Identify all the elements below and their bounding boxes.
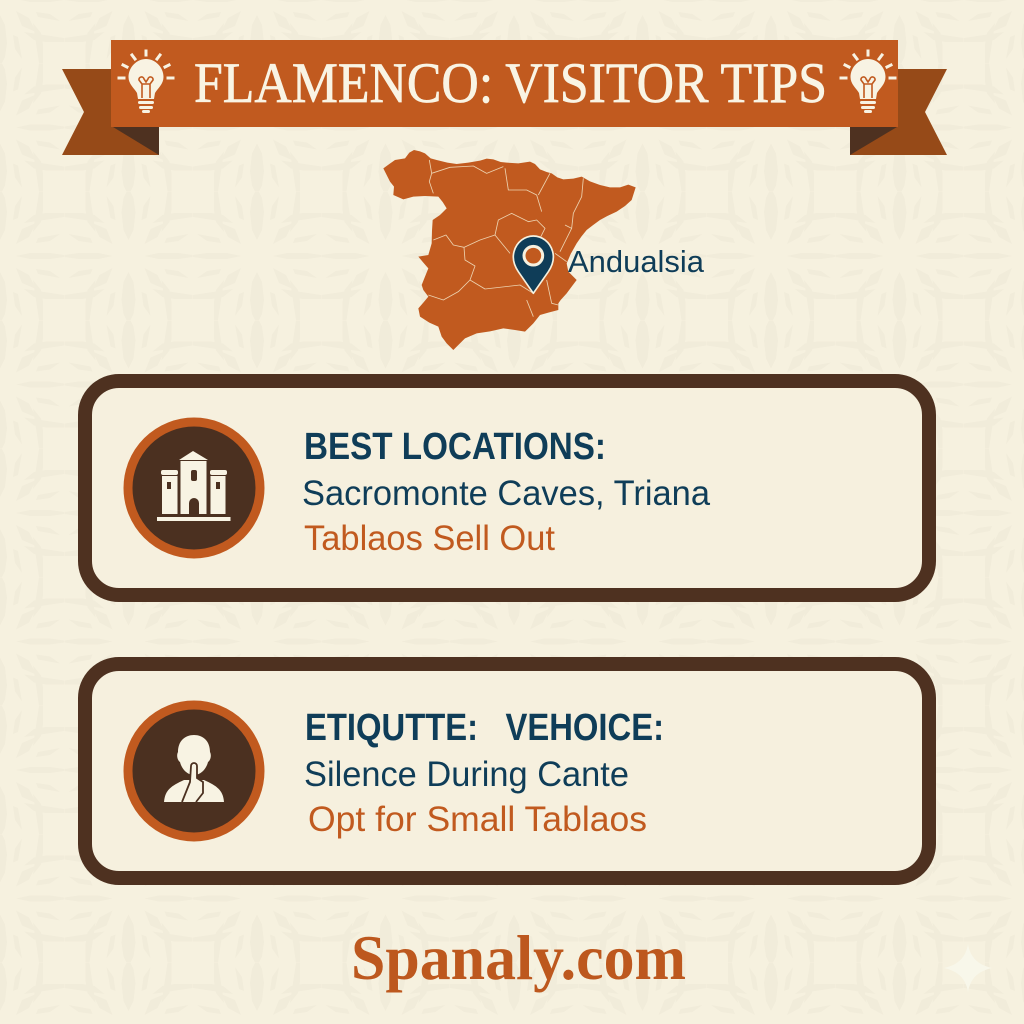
card frame — [85, 664, 929, 878]
map of Spain — [383, 150, 636, 350]
icon: sparkle — [944, 944, 992, 992]
card line: places: Sacromonte Caves, Triana — [302, 474, 711, 513]
card heading: ETIQUTTE: VEHOICE: — [305, 707, 664, 749]
icon: person shushing — [128, 705, 260, 837]
banner band — [111, 40, 898, 127]
icon: location pin — [513, 236, 553, 293]
icon: left light bulb — [119, 51, 173, 113]
map label: Andualsia — [568, 244, 705, 279]
card line: rule: Silence During Cante — [304, 755, 629, 794]
icon: castle building — [128, 422, 260, 554]
left ribbon fold — [113, 127, 159, 155]
footer brand: Spanaly.com — [351, 923, 686, 993]
card line: advice: Opt for Small Tablaos — [308, 800, 647, 839]
icon: right light bulb — [841, 51, 895, 113]
left ribbon tail — [62, 69, 159, 155]
title: FLAMENCO: VISITOR TIPS — [194, 52, 827, 115]
panel: best locations — [85, 381, 929, 595]
right ribbon fold — [850, 127, 897, 155]
map outline — [383, 150, 636, 350]
card frame — [85, 381, 929, 595]
panel: etiquette — [85, 664, 929, 878]
card heading: BEST LOCATIONS: — [304, 426, 606, 468]
region borders — [428, 160, 583, 317]
title banner — [62, 40, 947, 155]
card line: note: Tablaos Sell Out — [304, 519, 555, 558]
right ribbon tail — [850, 69, 947, 155]
